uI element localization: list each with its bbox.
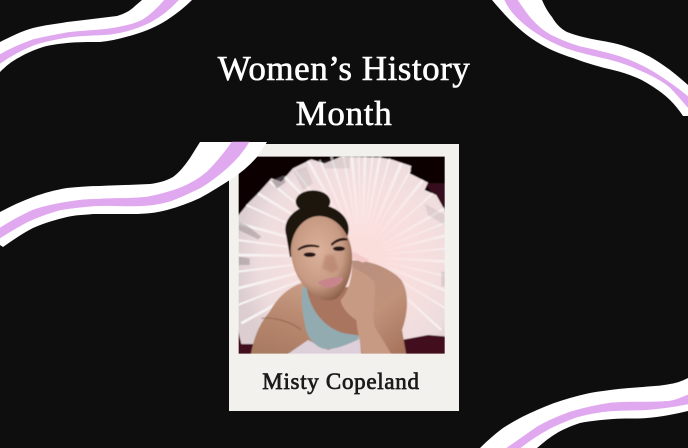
hand and forearm — [341, 266, 392, 355]
shoulders and arm — [251, 261, 407, 355]
title: Women’s History — [218, 49, 470, 88]
hair and bun — [285, 190, 349, 257]
caption: name: Misty Copeland — [262, 369, 420, 394]
photo: ballerina in a tutu — [235, 153, 448, 357]
title: Month — [296, 94, 392, 133]
facial features — [297, 238, 347, 287]
chest — [305, 287, 375, 337]
ribbon: bottom right — [480, 378, 688, 448]
card frame — [229, 144, 459, 411]
leotard — [302, 287, 359, 349]
face — [291, 216, 352, 300]
photo background — [238, 156, 445, 216]
polaroid card — [229, 144, 459, 411]
tutu — [235, 153, 448, 355]
title — [218, 49, 470, 133]
hair bow — [352, 252, 370, 263]
ribbon: middle left — [0, 142, 267, 247]
ribbon: top right — [492, 0, 688, 116]
ribbon: top left — [0, 0, 192, 72]
